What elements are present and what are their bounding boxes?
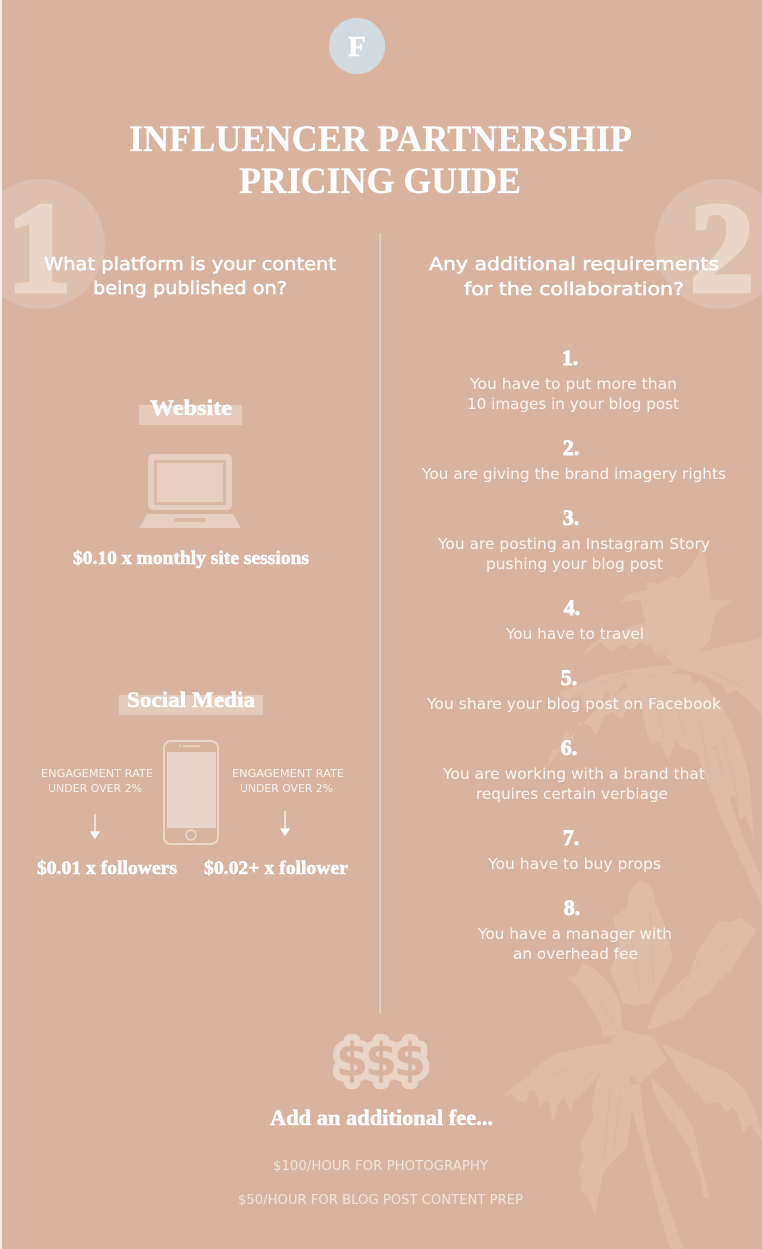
item 4 (505, 595, 644, 643)
question 2 heading: Any additional requirements (429, 254, 719, 275)
additional fee heading: Add an additional fee... (270, 1105, 493, 1130)
item 3: 3. (563, 505, 579, 530)
item 5: You share your blog post on Facebook (426, 695, 721, 713)
question 1 heading: What platform is your content (44, 254, 336, 275)
icon: dollar signs: $$$ (336, 1033, 426, 1087)
website formula: $0.10 x monthly site sessions (73, 548, 309, 569)
step number 2 badge (655, 177, 762, 319)
item 8: You have a manager with (477, 925, 672, 943)
logo badge: F (348, 31, 366, 63)
item 3: You are posting an Instagram Story (437, 535, 710, 553)
item 7: You have to buy props (487, 855, 661, 873)
item 1: 1. (562, 345, 578, 370)
item 7 (487, 825, 661, 873)
title: PRICING GUIDE (239, 161, 521, 202)
item 5 (426, 665, 721, 713)
item 6: requires certain verbiage (476, 785, 668, 803)
right engagement rate text (232, 768, 344, 795)
item 5: 5. (561, 665, 577, 690)
item 3 (437, 505, 710, 573)
item 6: You are working with a brand that (442, 765, 705, 783)
right engagement rate text: UNDER OVER 2% (240, 783, 333, 795)
left formula: $0.01 x followers (37, 858, 177, 879)
item 4: You have to travel (505, 625, 644, 643)
item 8: 8. (564, 895, 580, 920)
website label (139, 395, 242, 425)
icon: dollar signs: $$$ (336, 1033, 426, 1087)
panel: website pricing (73, 395, 309, 569)
step number 1 badge (0, 177, 105, 319)
item 4: 4. (564, 595, 580, 620)
question 1 heading: being published on? (93, 278, 287, 299)
left engagement rate text (41, 768, 153, 795)
step number 1 badge: 1 (7, 177, 71, 319)
panel: social media pricing (37, 687, 349, 879)
website label: Website (150, 395, 232, 420)
arrow: right down (281, 811, 289, 835)
question 2 heading (429, 254, 719, 300)
blog prep fee: $50/HOUR FOR BLOG POST CONTENT PREP (238, 1193, 523, 1208)
right formula: $0.02+ x follower (204, 858, 349, 879)
step number 2 badge: 2 (690, 177, 754, 319)
item 8: an overhead fee (513, 945, 638, 963)
icon: laptop (139, 454, 241, 528)
item 3: pushing your blog post (486, 555, 663, 573)
item 1: 10 images in your blog post (467, 395, 679, 413)
background: upper palm tree (547, 545, 762, 905)
item 6: 6. (561, 735, 577, 760)
question 1 heading (44, 254, 336, 299)
item 7: 7. (563, 825, 579, 850)
title (129, 119, 632, 202)
left engagement rate text: ENGAGEMENT RATE (41, 768, 153, 780)
item 2: 2. (563, 435, 579, 460)
item 8 (477, 895, 672, 963)
panel: additional requirements list (421, 345, 726, 963)
social media label: Social Media (127, 687, 255, 712)
right engagement rate text: ENGAGEMENT RATE (232, 768, 344, 780)
photography fee: $100/HOUR FOR PHOTOGRAPHY (273, 1159, 488, 1174)
item 6 (442, 735, 705, 803)
center divider (380, 233, 381, 1014)
item 1: You have to put more than (469, 375, 677, 393)
item 2 (421, 435, 726, 483)
item 2: You are giving the brand imagery rights (421, 465, 726, 483)
background: palm leaf streaks (540, 610, 750, 1180)
icon: smartphone (164, 741, 218, 844)
title: INFLUENCER PARTNERSHIP (129, 119, 632, 160)
arrow: left down (91, 814, 99, 838)
item 1 (467, 345, 679, 413)
logo badge (329, 18, 385, 74)
background: lower palm tree (502, 880, 762, 1249)
left engagement rate text: UNDER OVER 2% (48, 783, 142, 795)
question 2 heading: for the collaboration? (464, 279, 684, 300)
